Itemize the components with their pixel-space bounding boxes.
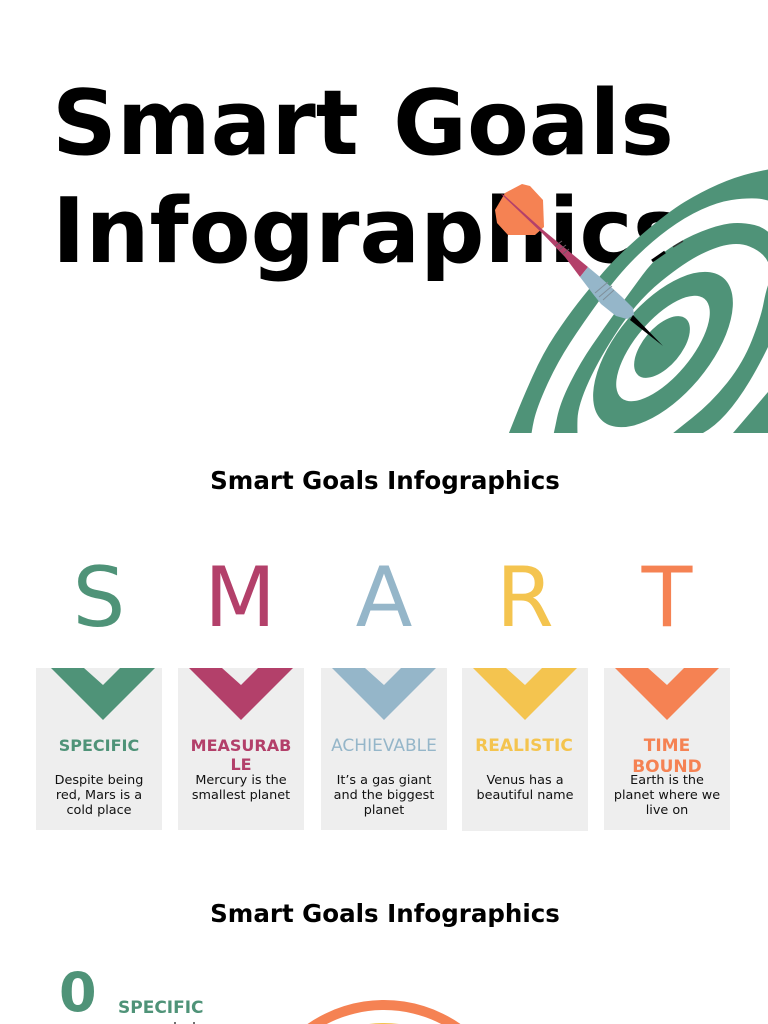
card title — [191, 736, 291, 774]
card text: Despite being — [55, 773, 143, 788]
ring chart — [308, 1000, 460, 1024]
card text: Earth is the — [630, 773, 704, 788]
card title: MEASURAB — [191, 736, 291, 755]
card title — [632, 736, 702, 777]
letter M: M — [204, 549, 276, 646]
card title: SPECIFIC — [59, 736, 139, 755]
panel: realistic — [462, 668, 588, 831]
label: specific: SPECIFIC — [118, 998, 204, 1018]
panel: specific — [36, 668, 162, 830]
icon: chevron — [332, 668, 436, 720]
card text — [55, 773, 143, 818]
title — [52, 71, 686, 284]
number 0: 0 — [59, 961, 97, 1024]
target rings — [509, 170, 768, 433]
card title: ACHIEVABLE — [331, 736, 437, 756]
card title: REALISTIC — [475, 736, 573, 756]
card text: Venus has a — [486, 773, 564, 788]
panel: achievable — [321, 668, 447, 830]
card text: live on — [646, 803, 688, 818]
card text: and the biggest — [334, 788, 434, 803]
icon: chevron — [51, 668, 155, 720]
card text: cold place — [66, 803, 132, 818]
panel: time bound — [604, 668, 730, 830]
panel: measurable — [178, 668, 304, 830]
card title: BOUND — [632, 757, 702, 777]
title: Smart Goals — [52, 71, 674, 176]
icon: chevron — [473, 668, 577, 720]
card text — [614, 773, 720, 818]
icon: dart hitting target — [495, 170, 768, 433]
letter T: T — [642, 549, 692, 646]
title: Infographics — [52, 179, 686, 284]
card text: Mercury is the — [195, 773, 287, 788]
text fragment: ascender tips cut off by the page edge — [174, 1022, 195, 1024]
card text — [334, 773, 434, 818]
heading: section 1: Smart Goals Infographics — [210, 466, 560, 495]
icon: chevron — [615, 668, 719, 720]
card text — [476, 773, 574, 803]
card text: smallest planet — [192, 788, 290, 803]
card text — [192, 773, 290, 803]
card text: red, Mars is a — [56, 788, 142, 803]
card text: planet where we — [614, 788, 720, 803]
letter A: A — [356, 549, 412, 646]
heading: section 2: Smart Goals Infographics — [210, 899, 560, 928]
letter R: R — [496, 549, 554, 646]
icon: chevron — [189, 668, 293, 720]
card text: It’s a gas giant — [337, 773, 431, 788]
card text: beautiful name — [476, 788, 574, 803]
card title: TIME — [644, 736, 690, 756]
card text: planet — [364, 803, 404, 818]
dart — [495, 184, 663, 346]
letter S: S — [73, 549, 125, 646]
card title: LE — [230, 755, 252, 774]
